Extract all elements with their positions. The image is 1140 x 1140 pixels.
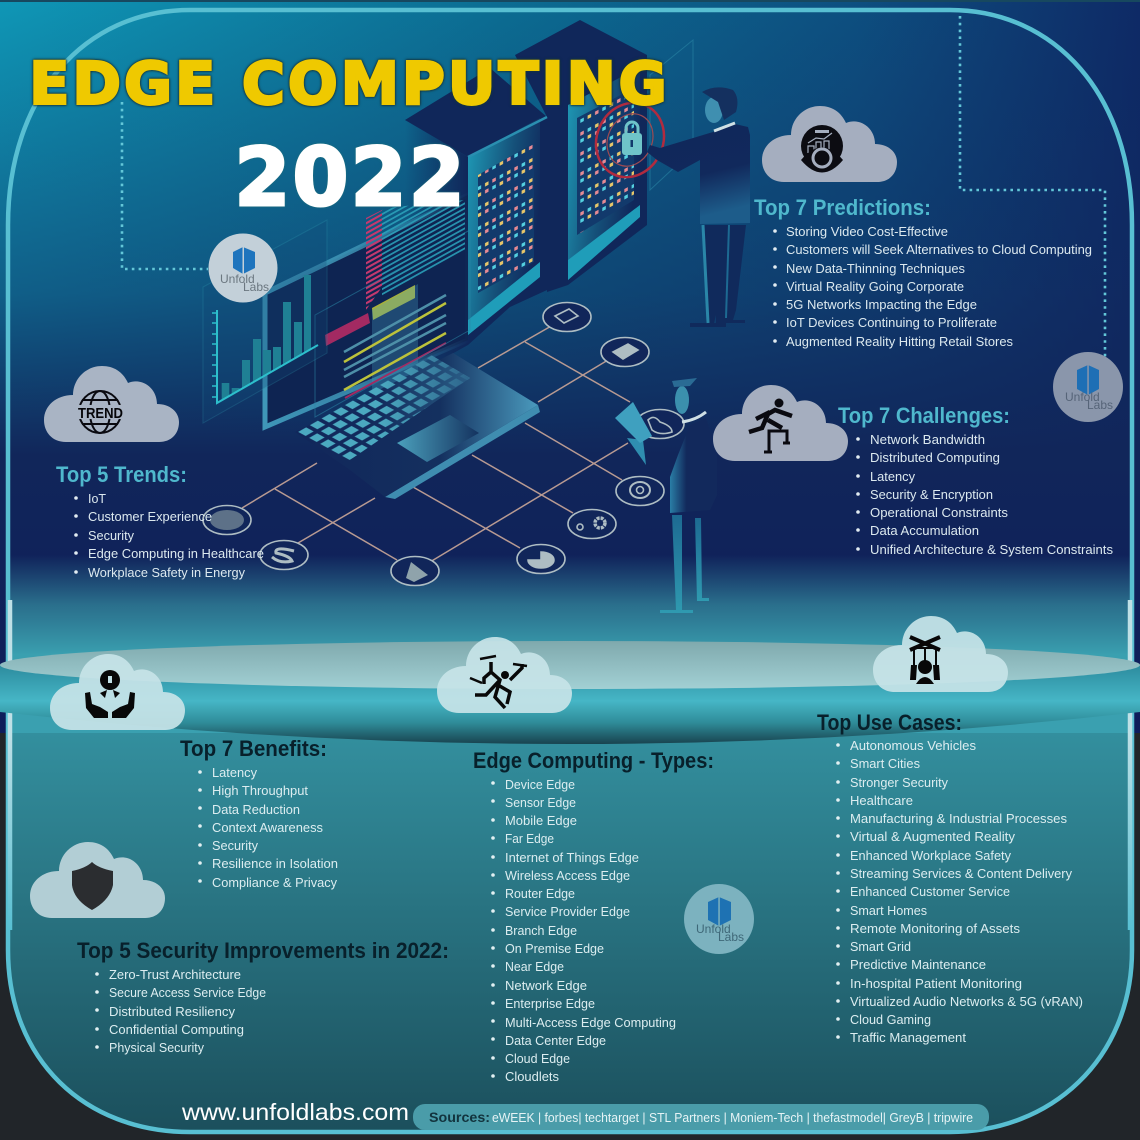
logo: unfold labs lower (684, 884, 754, 954)
person: engineer with tablet (615, 378, 717, 613)
illustration: data centre and laptop (203, 20, 750, 613)
cloud icon: trends: TREND (78, 405, 123, 422)
cloud icon: types (437, 637, 572, 713)
logo: unfold labs right: Unfold (1065, 390, 1100, 404)
panel: top 7 benefits: Data Reduction (212, 802, 300, 817)
panel: top use cases: Remote Monitoring of Assets (850, 921, 1020, 936)
panel: top 7 challenges (838, 403, 1113, 557)
dotted connector: top left (122, 102, 208, 269)
node: at sign (616, 476, 664, 506)
panel: top 7 predictions (754, 195, 1092, 349)
panel: edge computing types: Internet of Things Edge (505, 850, 639, 865)
node: cloud (636, 410, 684, 438)
panel: edge computing types: Multi-Access Edge Computing (505, 1015, 676, 1030)
panel: top 7 challenges: Data Accumulation (870, 523, 979, 538)
logo: unfold labs lower: Labs (718, 930, 744, 944)
logo: unfold labs right: Labs (1087, 398, 1113, 412)
laptop base (295, 353, 540, 499)
cloud icon: trends (44, 366, 179, 442)
node: dollar (260, 540, 308, 570)
heading: benefits: Top 7 Benefits: (180, 736, 327, 761)
panel: edge computing types: Enterprise Edge (505, 996, 595, 1011)
panel: top 7 predictions: New Data-Thinning Techniques (786, 261, 965, 276)
node: laptop (543, 302, 591, 332)
panel: top 5 security improvements: Confidential Computing (109, 1022, 244, 1037)
sources bar (413, 1104, 989, 1130)
panel: edge computing types: Data Center Edge (505, 1033, 606, 1048)
heading: security improvements: Top 5 Security Improvements in 2022: (77, 938, 449, 963)
panel: edge computing types: Router Edge (505, 886, 575, 901)
sources bar: eWEEK | forbes| techtarget | STL Partners | Moniem-Tech | thefastmodel| GreyB | tripwire (492, 1110, 973, 1125)
node: pie chart (517, 544, 565, 574)
heading: types: Edge Computing - Types: (473, 748, 714, 773)
cloud icon: security (30, 842, 165, 918)
logo: unfold labs right (1053, 352, 1123, 422)
heading: challenges: Top 7 Challenges: (838, 403, 1010, 428)
title line: year: 2022 (234, 131, 464, 224)
panel: top 7 challenges: Security & Encryption (870, 487, 993, 502)
panel: top use cases: In-hospital Patient Monitoring (850, 976, 1022, 991)
panel: top use cases: Enhanced Workplace Safety (850, 848, 1011, 863)
panel: top use cases (817, 710, 1083, 1045)
panel: top 7 challenges: Operational Constraints (870, 505, 1008, 520)
panel: top use cases: Predictive Maintenance (850, 957, 986, 972)
panel: top use cases: Autonomous Vehicles (850, 738, 976, 753)
panel: top use cases: Smart Homes (850, 903, 927, 918)
panel: top use cases: Smart Grid (850, 939, 911, 954)
network lines (242, 325, 630, 562)
panel: top 7 predictions: IoT Devices Continuing to Proliferate (786, 315, 997, 330)
panel: edge computing types: Wireless Access Edge (505, 868, 630, 883)
panel: top use cases: Virtualized Audio Networks & 5G (vRAN) (850, 994, 1083, 1009)
panel: top 5 trends: Workplace Safety in Energy (88, 565, 245, 580)
panel: edge computing types: Mobile Edge (505, 813, 577, 828)
cloud icon: use cases (873, 616, 1008, 692)
panel: top use cases: Stronger Security (850, 775, 948, 790)
panel: top 5 security improvements: Distributed Resiliency (109, 1004, 235, 1019)
panel: top 7 challenges: Latency (870, 469, 915, 484)
node: globe (203, 506, 251, 534)
panel: top 5 security improvements: Zero-Trust Architecture (109, 967, 241, 982)
logo: unfold labs lower: Unfold (696, 922, 731, 936)
person: standing engineer (647, 87, 750, 327)
panel: top 7 challenges: Network Bandwidth (870, 432, 985, 447)
panel: top 7 benefits: Compliance & Privacy (212, 875, 337, 890)
panel: edge computing types: On Premise Edge (505, 941, 604, 956)
panel: top 5 security improvements: Secure Access Service Edge (109, 985, 266, 1000)
panel: edge computing types: Near Edge (505, 959, 564, 974)
panel: top 7 predictions: Customers will Seek Alternatives to Cloud Computing (786, 242, 1092, 257)
panel: top 7 predictions: Storing Video Cost-Effective (786, 224, 948, 239)
panel: top 5 trends: Customer Experience (88, 509, 212, 524)
sources bar: Sources: (429, 1109, 490, 1125)
panel: top 7 challenges: Distributed Computing (870, 450, 1000, 465)
panel: top 7 challenges: Unified Architecture & System Constraints (870, 542, 1113, 557)
panel: top 7 benefits (180, 736, 338, 890)
title (30, 50, 666, 224)
panel: edge computing types: Sensor Edge (505, 795, 576, 810)
panel: top 7 benefits: Latency (212, 765, 257, 780)
heading: use cases: Top Use Cases: (817, 710, 962, 735)
cloud icon: challenges (713, 385, 848, 461)
security lock (584, 92, 676, 188)
panel: top 7 benefits: Security (212, 838, 258, 853)
server tower right (515, 20, 693, 292)
panel: top 7 benefits: High Throughput (212, 783, 308, 798)
panel: top 7 benefits: Resilience in Isolation (212, 856, 338, 871)
panel: top 7 predictions: Augmented Reality Hitting Retail Stores (786, 334, 1013, 349)
panel: top use cases: Enhanced Customer Service (850, 884, 1010, 899)
logo: unfold labs left: Labs (243, 280, 269, 294)
panel: top 7 predictions: Virtual Reality Going Corporate (786, 279, 964, 294)
panel: top use cases: Manufacturing & Industrial Processes (850, 811, 1068, 826)
dotted connector: top right (960, 16, 1105, 358)
panel: top 5 trends: Security (88, 528, 134, 543)
panel: top 7 predictions: 5G Networks Impacting the Edge (786, 297, 977, 312)
cloud icon: benefits (50, 654, 185, 730)
server tower left (405, 68, 547, 380)
panel: edge computing types (473, 748, 714, 1084)
website url: www.unfoldlabs.com (181, 1099, 409, 1125)
panel: top use cases: Healthcare (850, 793, 913, 808)
panel: top 5 trends (56, 462, 264, 580)
panel: edge computing types: Service Provider Edge (505, 904, 630, 919)
disc platform (0, 641, 1140, 744)
node: briefcase (601, 338, 649, 366)
panel: top 5 trends: IoT (88, 491, 106, 506)
panel: top 5 security improvements: Physical Security (109, 1040, 204, 1055)
panel: edge computing types: Far Edge (505, 831, 554, 846)
panel: edge computing types: Branch Edge (505, 923, 577, 938)
panel: top use cases: Traffic Management (850, 1030, 966, 1045)
node: gear (568, 510, 616, 538)
panel: top 5 security improvements (77, 938, 449, 1055)
floating chart panel (203, 220, 327, 423)
logo: unfold labs left (208, 234, 278, 302)
panel: top 5 trends: Edge Computing in Healthcare (88, 546, 264, 561)
cloud icon: predictions (762, 106, 897, 182)
panel: top 7 benefits: Context Awareness (212, 820, 323, 835)
title line: edge computing: EDGE COMPUTING (30, 50, 666, 118)
panel: edge computing types: Cloudlets (505, 1069, 559, 1084)
panel: top use cases: Virtual & Augmented Reality (850, 829, 1015, 844)
node: funnel (391, 556, 439, 586)
logo: unfold labs left: Unfold (220, 272, 255, 286)
heading: trends: Top 5 Trends: (56, 462, 187, 487)
panel: edge computing types: Network Edge (505, 978, 587, 993)
panel: top use cases: Streaming Services & Content Delivery (850, 866, 1072, 881)
panel: top use cases: Cloud Gaming (850, 1012, 931, 1027)
panel: edge computing types: Cloud Edge (505, 1051, 570, 1066)
laptop screen (265, 195, 470, 427)
heading: predictions: Top 7 Predictions: (754, 195, 931, 220)
panel: edge computing types: Device Edge (505, 777, 575, 792)
panel: top use cases: Smart Cities (850, 756, 920, 771)
network icon nodes (203, 302, 684, 586)
